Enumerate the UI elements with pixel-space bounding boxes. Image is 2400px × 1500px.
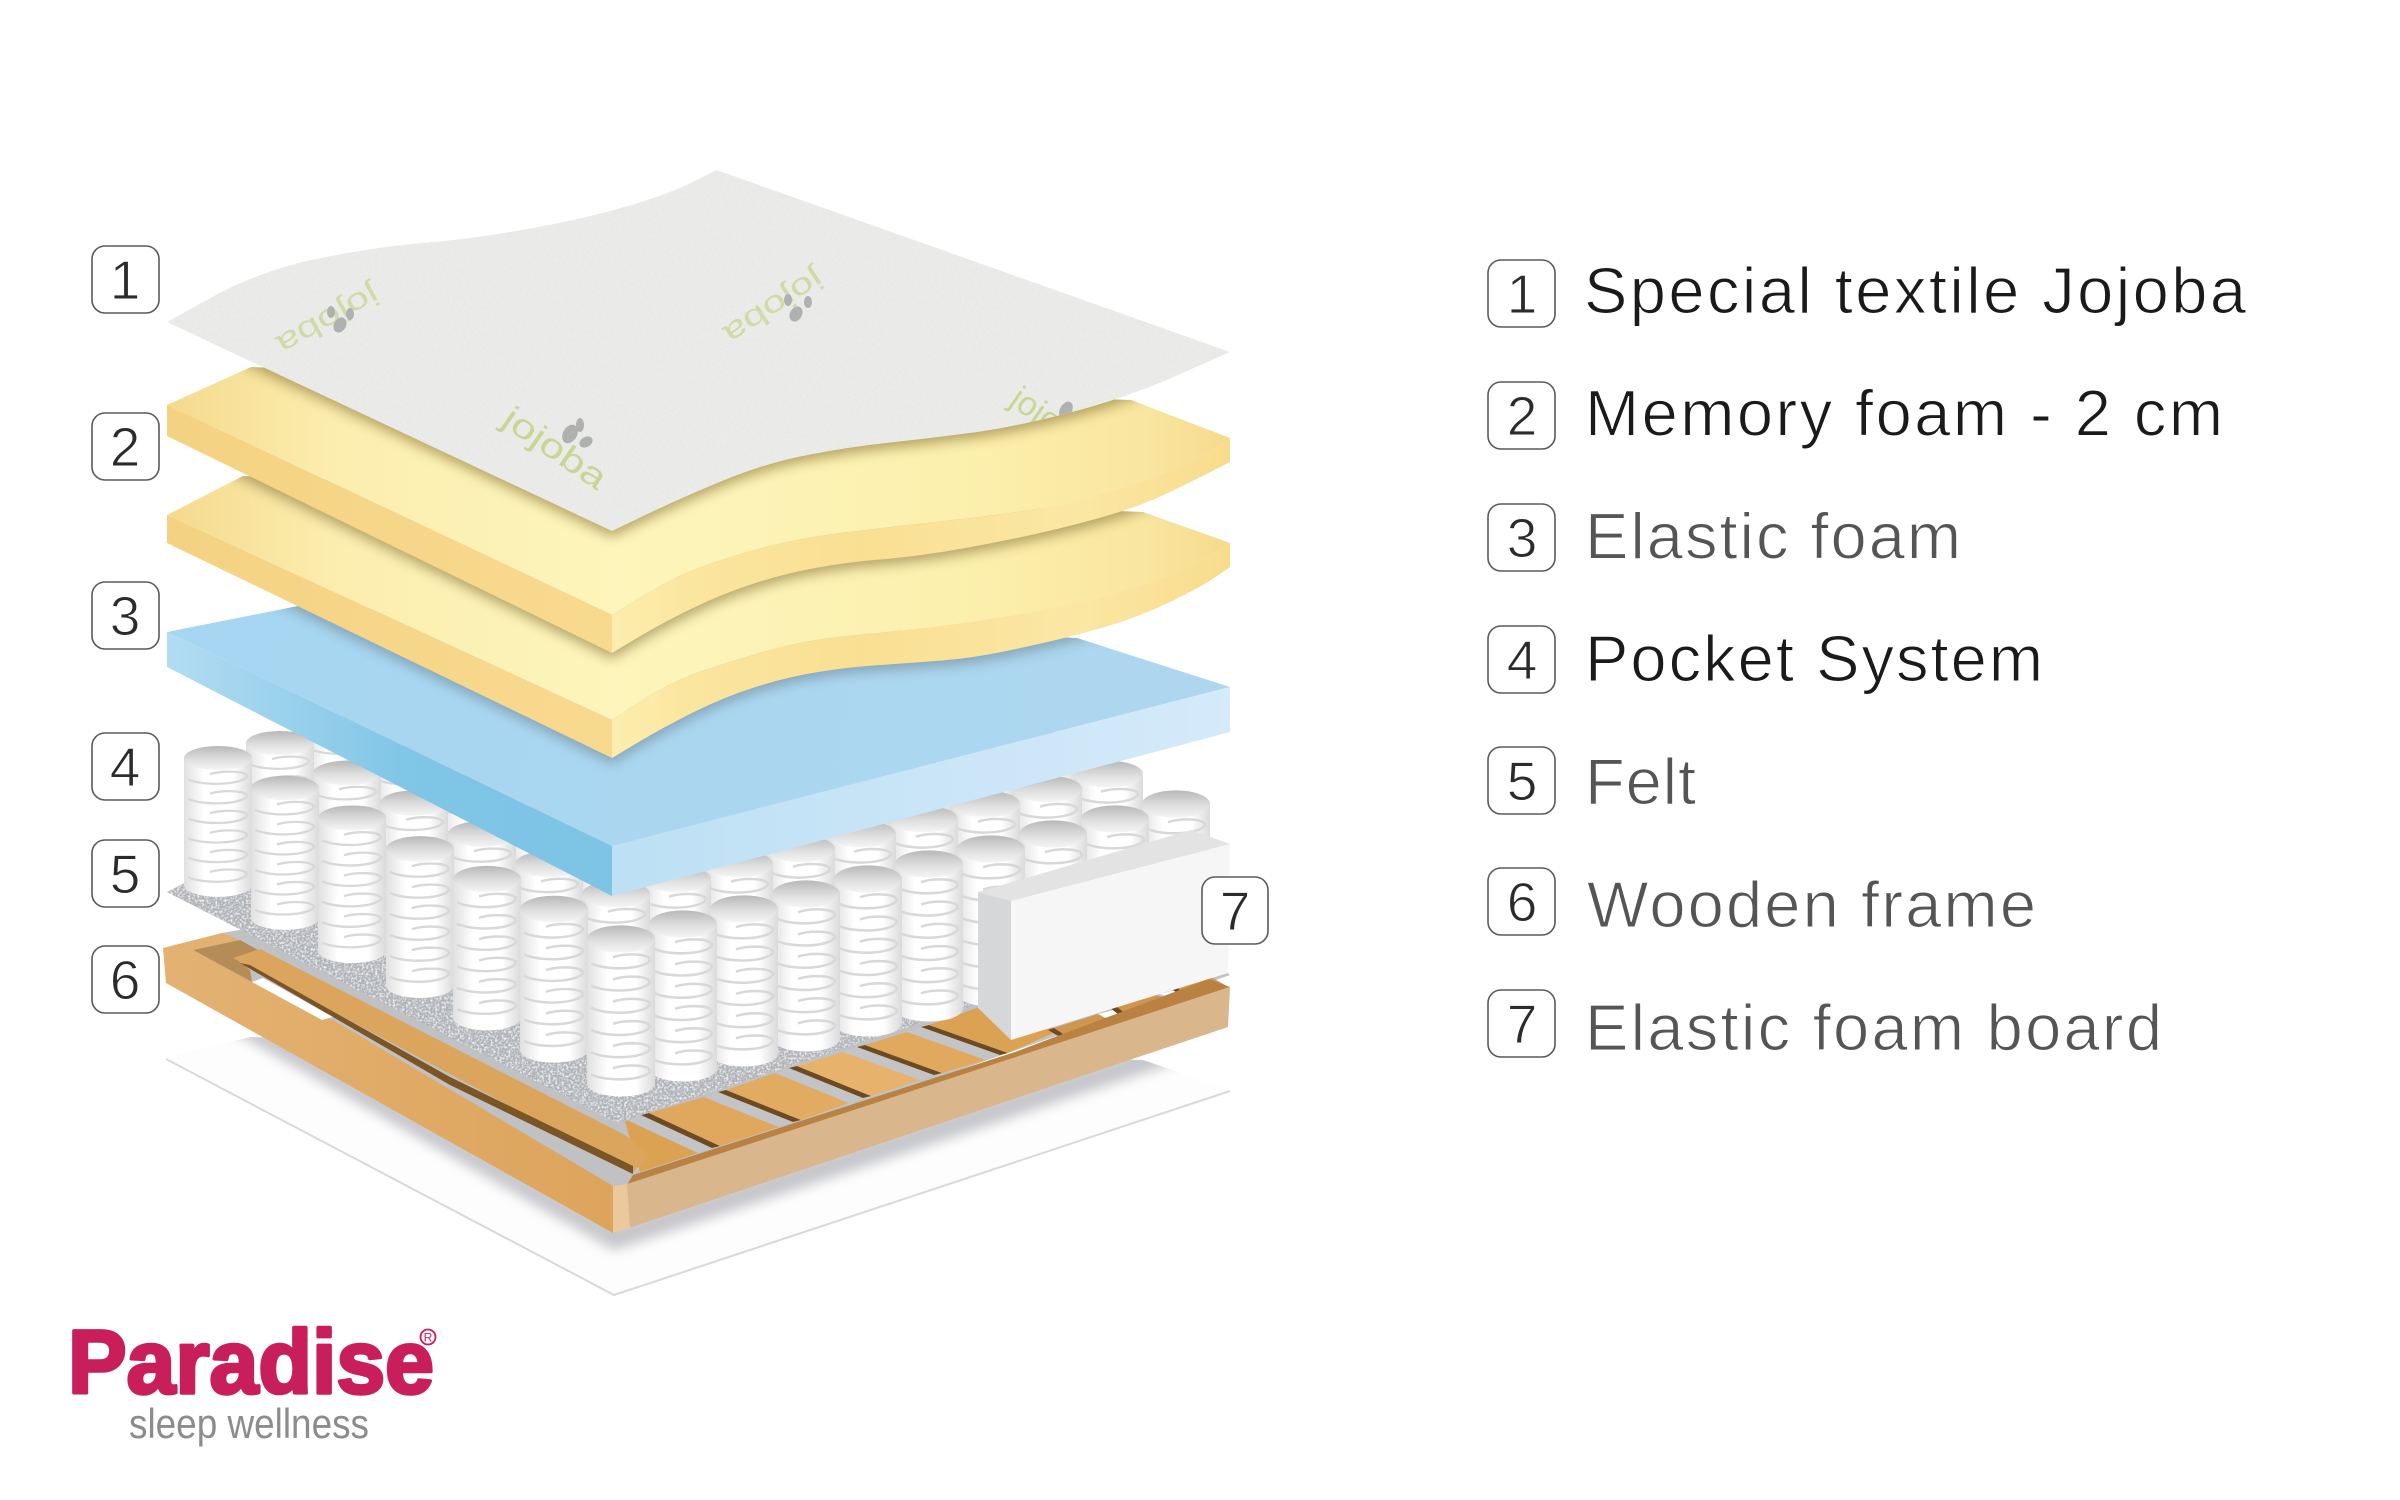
panel: mattress diagram: [163, 170, 1230, 1295]
jojoba mark right: [721, 262, 824, 338]
logo: Paradise sleep wellness: R: [424, 1330, 433, 1344]
tag 5: [92, 840, 159, 907]
layer 4: pocket springs: [184, 611, 1210, 1097]
logo: Paradise sleep wellness: Paradise: [68, 1313, 434, 1413]
jojoba mark right: jojoba: [717, 261, 830, 351]
legend item 1: Special textile Jojoba: [1584, 254, 2247, 327]
layer 6: wooden frame: [163, 800, 1230, 1233]
front-right rim and face: [627, 979, 1230, 1185]
layer 1: special textile jojoba: [167, 170, 1230, 537]
layer 2b: lower yellow foam: [167, 476, 1230, 758]
tag 3: [92, 582, 159, 649]
tag 7: 7: [1220, 880, 1250, 942]
legend item 5: [1488, 745, 1696, 818]
slats: [625, 976, 1225, 1172]
tag 1: [92, 246, 159, 313]
legend item 5: 5: [1507, 750, 1537, 812]
jojoba mark cropped: jojoba: [1003, 379, 1100, 462]
legend item 1: 1: [1507, 263, 1537, 325]
tag 6: [92, 946, 159, 1013]
logo: Paradise sleep wellness: sleep wellness: [129, 1400, 369, 1447]
left outer face: [163, 933, 627, 1233]
tag 2: 2: [110, 416, 140, 478]
legend item 3: Elastic foam: [1585, 500, 1961, 572]
legend item 7: Elastic foam board: [1585, 991, 2162, 1064]
tag 7: [1202, 877, 1268, 944]
legend item 2: 2: [1507, 385, 1537, 447]
layer 5: felt: [167, 740, 982, 1123]
layer: bottom white sheet: [166, 1037, 1230, 1296]
infographic: mattress layers: [72, 170, 2246, 1446]
tag 4: 4: [110, 736, 140, 798]
jojoba mark front: jojoba: [494, 399, 614, 497]
diagram number tags: [92, 246, 1268, 1013]
legend item 5: Felt: [1585, 745, 1696, 818]
layer 3: blue elastic foam: [167, 606, 1230, 896]
tag 5: 5: [110, 843, 140, 905]
layer 2a: upper yellow foam: [167, 367, 1230, 653]
legend: [1488, 254, 2247, 1064]
tag 6: 6: [110, 949, 140, 1011]
legend item 2: Memory foam - 2 cm: [1585, 376, 2223, 450]
jojoba mark left: jojoba: [270, 277, 386, 361]
tag 2: [92, 413, 159, 480]
legend item 3: 3: [1507, 507, 1537, 569]
left interior and rail: [193, 940, 258, 982]
jojoba mark cropped: [1004, 385, 1073, 423]
layer 7: elastic foam board: [978, 830, 1230, 1040]
legend item 6: Wooden frame: [1587, 868, 2036, 941]
tag 1: 1: [110, 249, 140, 311]
legend item 7: 7: [1507, 993, 1537, 1055]
legend item 4: Pocket System: [1585, 622, 2043, 695]
legend item 6: 6: [1507, 871, 1537, 933]
legend item 4: 4: [1507, 629, 1537, 691]
tag 3: 3: [110, 585, 140, 647]
tag 4: [92, 733, 159, 800]
